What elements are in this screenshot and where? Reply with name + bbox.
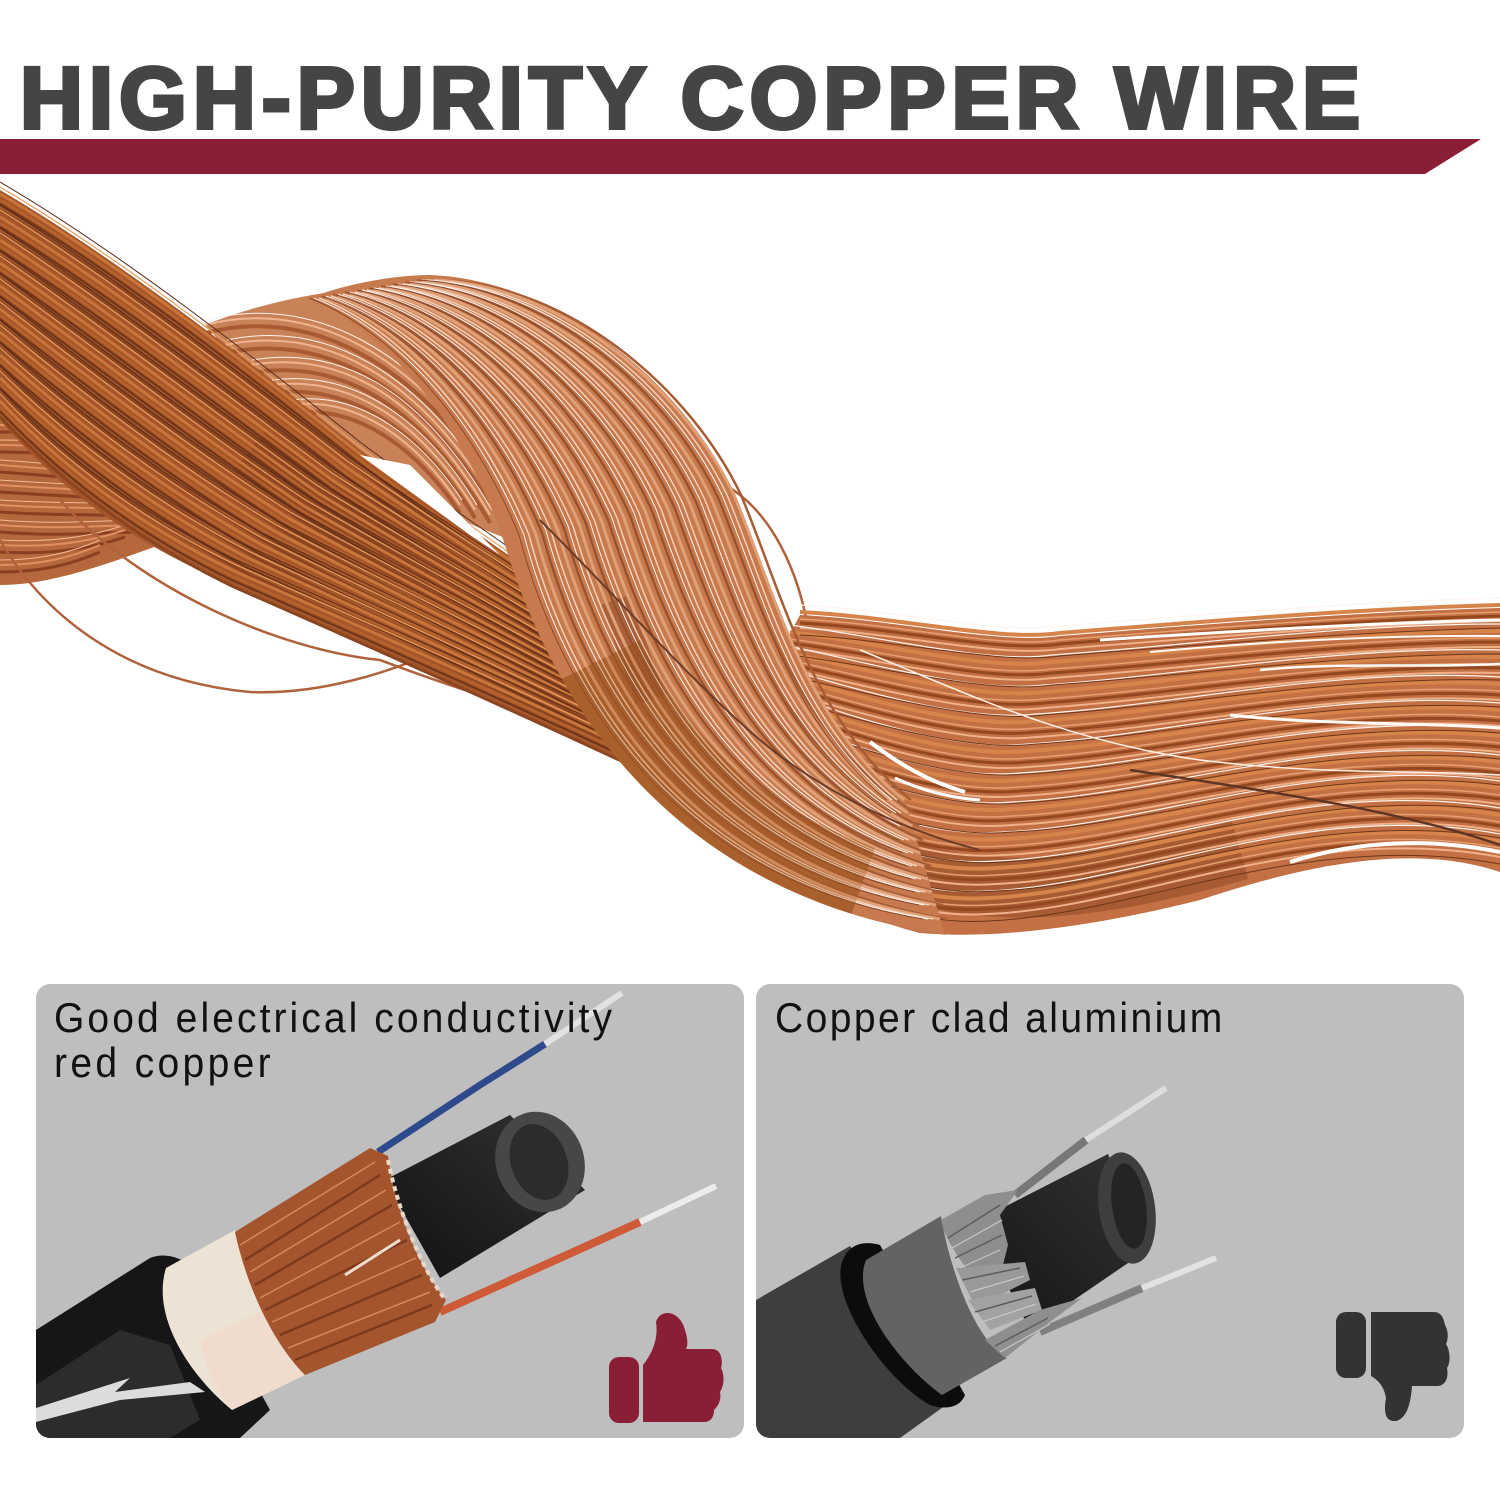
dark diagonal bundle xyxy=(0,182,670,780)
front light arc bundle xyxy=(309,275,947,935)
icon: tinned braid xyxy=(941,1190,1082,1358)
loose wires xyxy=(0,485,860,770)
back arc bundle xyxy=(205,285,560,560)
back left bundle xyxy=(0,418,220,585)
icon: thumbs down xyxy=(1336,1312,1450,1421)
icon: inner black tube xyxy=(392,1112,585,1278)
text: red copper caption xyxy=(54,994,613,1086)
icon: blue wire xyxy=(378,993,622,1152)
icon: red wire xyxy=(440,1186,716,1312)
icon: inner black tube xyxy=(1000,1152,1156,1319)
right bundle xyxy=(790,598,1500,935)
text: copper clad aluminium caption: Copper clad aluminium xyxy=(775,994,1222,1041)
icon: grey wires xyxy=(1015,1088,1216,1332)
icon: inner grey sleeve xyxy=(863,1216,1007,1395)
text: red copper caption: red copper xyxy=(54,1039,271,1086)
title banner bar xyxy=(0,139,1481,174)
highlighted single wire xyxy=(540,520,980,850)
panel: copper clad aluminium xyxy=(756,984,1464,1438)
icon: cream tape layer xyxy=(163,1230,305,1410)
icon: black outer jacket xyxy=(36,1256,270,1438)
icon: black ring xyxy=(840,1243,965,1408)
icon: grey outer jacket xyxy=(756,1246,960,1438)
text: red copper caption: Good electrical conductivity xyxy=(54,994,613,1041)
icon: thumbs up xyxy=(609,1313,724,1423)
copper wire bundle photo xyxy=(0,182,1500,935)
panel: red copper xyxy=(36,984,744,1438)
white gap between bundles xyxy=(360,455,500,555)
icon: copper braid xyxy=(235,1148,446,1375)
title: HIGH-PURITY COPPER WIRE xyxy=(20,50,1360,147)
